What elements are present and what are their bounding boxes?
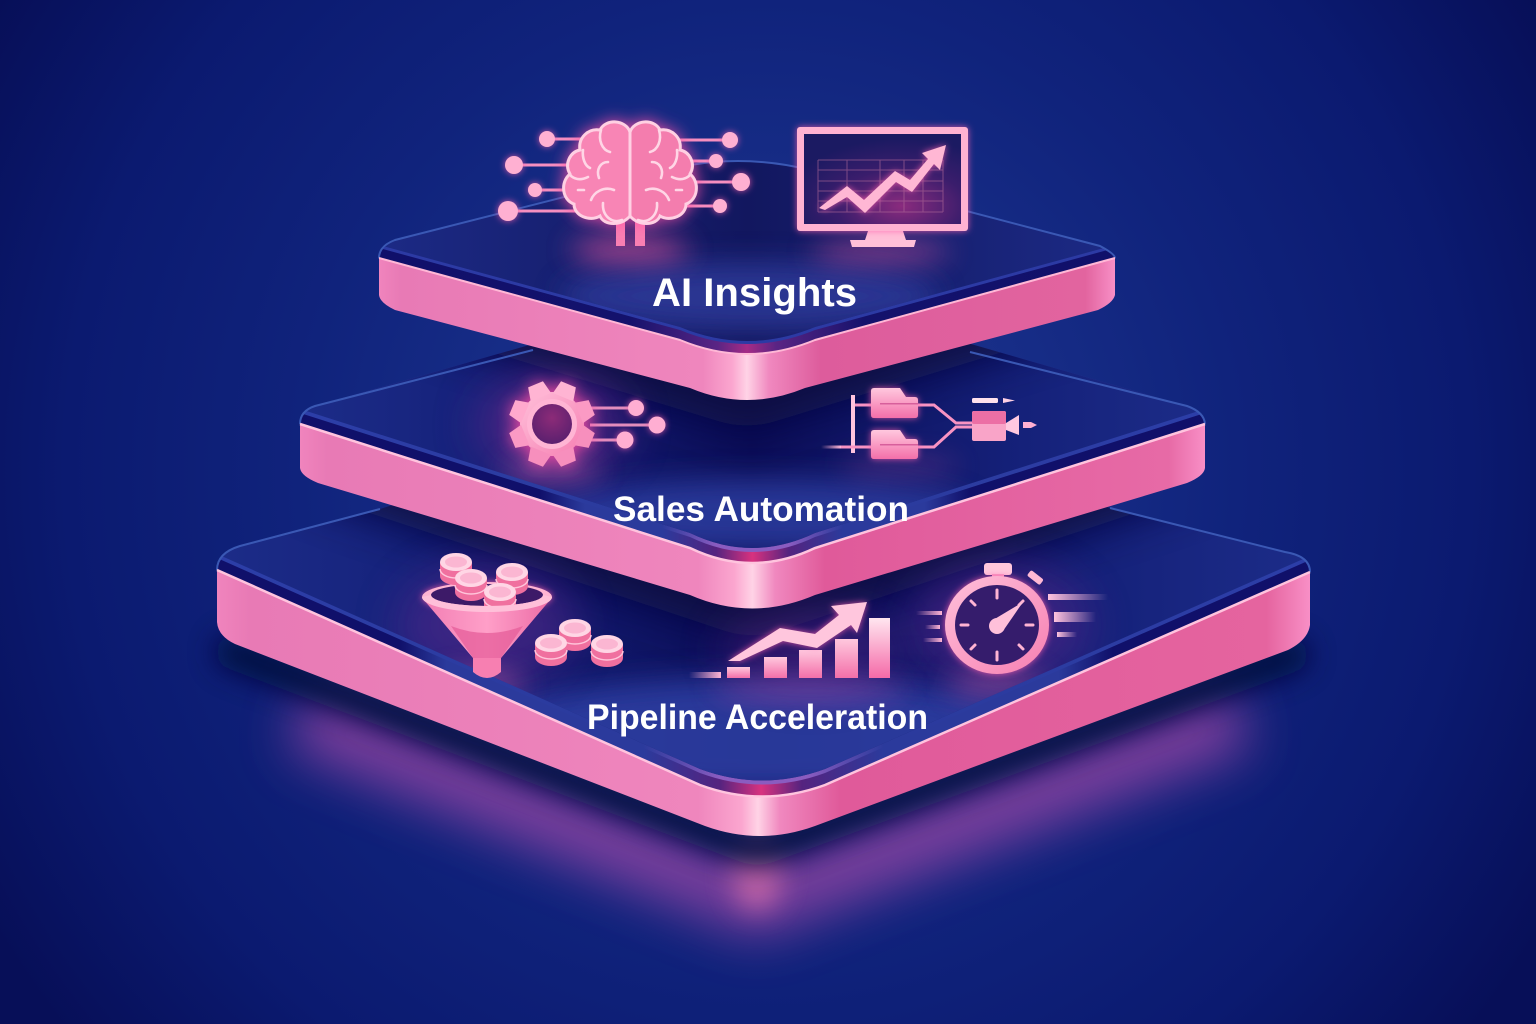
- front edge highlight: [300, 424, 1205, 563]
- back edge line: [300, 350, 1205, 424]
- slab side: [217, 400, 1310, 836]
- label: Pipeline Acceleration: Pipeline Acceleration: [587, 698, 928, 737]
- icon: monitor with rising chart: [797, 127, 968, 247]
- slab surface: [218, 505, 1309, 796]
- panel: Sales Automation slab: [299, 344, 1206, 608]
- slab side: [379, 200, 1115, 400]
- label: Sales Automation: Sales Automation: [613, 490, 909, 529]
- label: AI Insights: AI Insights: [652, 271, 857, 315]
- panel: Pipeline Acceleration slab: [216, 505, 1311, 836]
- glow under the stack: [232, 652, 1292, 910]
- back edge line: [217, 508, 1310, 572]
- slab surface: [301, 344, 1204, 562]
- icon: folder workflow: [821, 388, 1037, 459]
- panel: AI Insights slab: [379, 122, 1115, 400]
- icon: funnel with coins: [422, 553, 623, 678]
- back edge line: [379, 161, 1115, 258]
- icon: gear with nodes: [508, 380, 666, 468]
- slab surface: [379, 148, 1115, 354]
- icon: stopwatch with speed lines: [916, 563, 1108, 674]
- front edge highlight: [217, 570, 1310, 796]
- slab side: [300, 300, 1205, 608]
- icon: growth bar chart with arrow: [689, 602, 890, 678]
- icon: glowing brain with circuit nodes: [498, 122, 750, 246]
- front edge highlight: [379, 258, 1115, 354]
